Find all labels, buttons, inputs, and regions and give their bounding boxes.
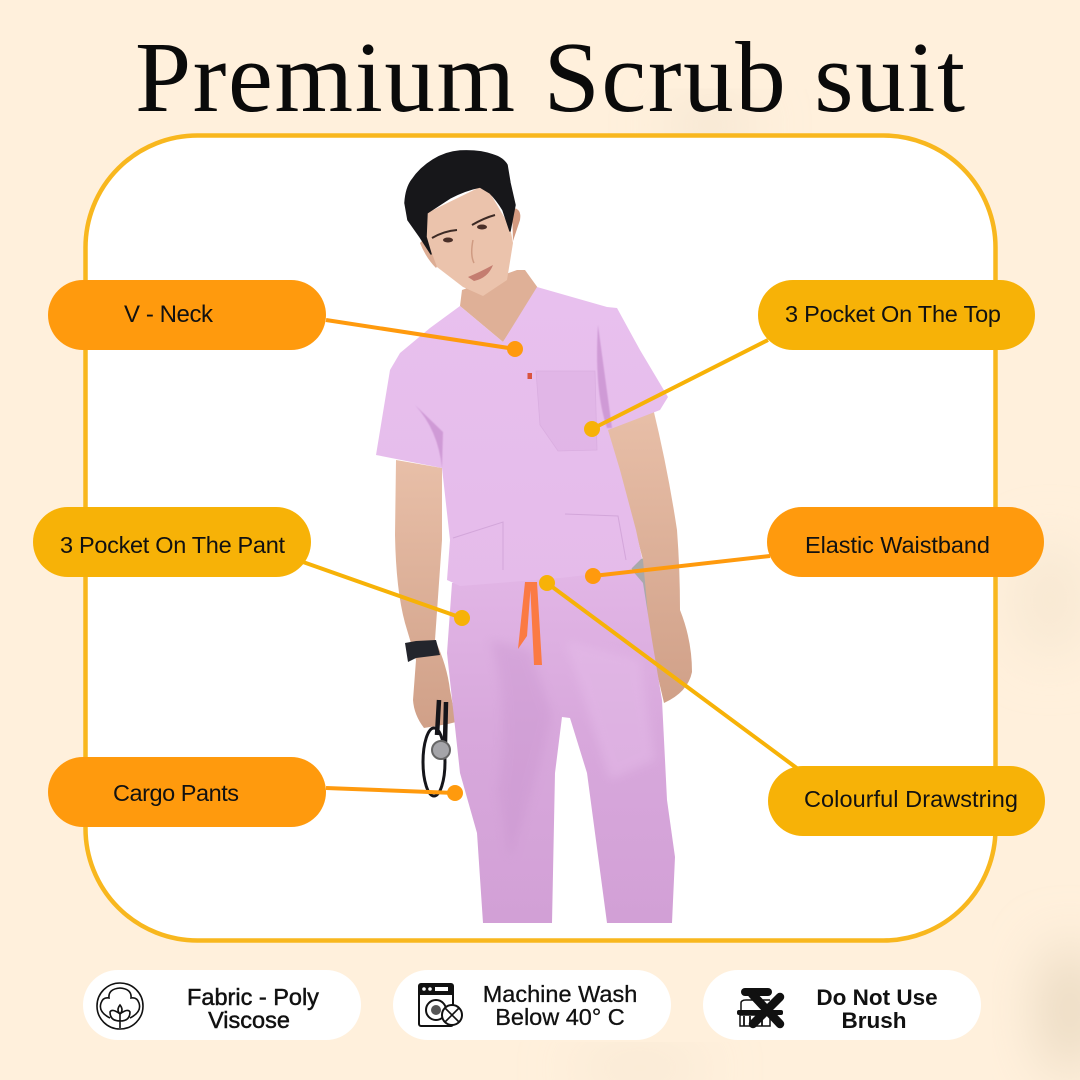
care card: fabric	[83, 970, 361, 1040]
chest pocket	[536, 371, 597, 451]
label: Cargo Pants: Cargo Pants	[113, 780, 239, 806]
sleeve shading	[415, 325, 612, 468]
connector: Cargo Pants	[326, 785, 463, 801]
label: Colourful Drawstring	[768, 766, 1045, 836]
label: 3 Pocket On The Pant	[33, 507, 311, 577]
left arm	[395, 460, 456, 728]
care card: brush: Brush	[841, 1008, 907, 1033]
care card: fabric: Viscose	[208, 1007, 290, 1033]
care card: machine wash	[393, 970, 671, 1040]
connector: V-Neck	[326, 320, 523, 357]
label: 3 Pocket On The Top	[758, 280, 1035, 350]
connector: 3 Pocket On The Pant	[303, 562, 470, 626]
face details	[432, 215, 495, 281]
right arm	[606, 408, 692, 703]
hair	[405, 151, 515, 254]
drawstring	[518, 582, 542, 665]
label: Elastic Waistband: Elastic Waistband	[805, 532, 990, 558]
label: Elastic Waistband	[767, 507, 1044, 577]
label: V - Neck: V - Neck	[124, 301, 214, 328]
stethoscope	[423, 700, 450, 796]
care card: machine wash: Below 40° C	[495, 1004, 625, 1030]
face	[426, 187, 513, 296]
lower pockets	[453, 514, 626, 570]
connector: Colourful Drawstring	[539, 575, 798, 769]
pants fold shading	[490, 640, 552, 860]
logo mark	[528, 373, 532, 379]
connector: 3 Pocket On The Top	[584, 340, 768, 437]
figure: model in lilac scrub suit	[376, 151, 692, 923]
icon: cotton plant	[97, 983, 143, 1029]
label: 3 Pocket On The Top: 3 Pocket On The Top	[785, 301, 1001, 327]
shirt	[376, 287, 668, 586]
right ear	[512, 208, 520, 241]
icon: brush crossed out	[737, 992, 783, 1026]
label: V - Neck	[48, 280, 326, 350]
label: 3 Pocket On The Pant: 3 Pocket On The Pant	[60, 532, 285, 558]
label: Cargo Pants	[48, 757, 326, 827]
care card: machine wash: Machine Wash	[483, 981, 637, 1007]
panel: product frame	[86, 136, 996, 940]
care card: fabric: Fabric - Poly	[187, 984, 319, 1010]
neck	[460, 270, 538, 342]
label: Colourful Drawstring: Colourful Drawstring	[804, 786, 1018, 812]
left ear	[420, 237, 440, 268]
connector: Elastic Waistband	[585, 556, 770, 584]
wristwatch	[405, 640, 440, 662]
care card: brush	[703, 970, 981, 1040]
care card: brush: Do Not Use	[816, 985, 938, 1010]
icon: washing machine crossed	[419, 984, 462, 1026]
pants	[447, 568, 675, 923]
title: Premium Scrub suit	[135, 21, 965, 133]
grey bag behind model	[630, 558, 650, 640]
